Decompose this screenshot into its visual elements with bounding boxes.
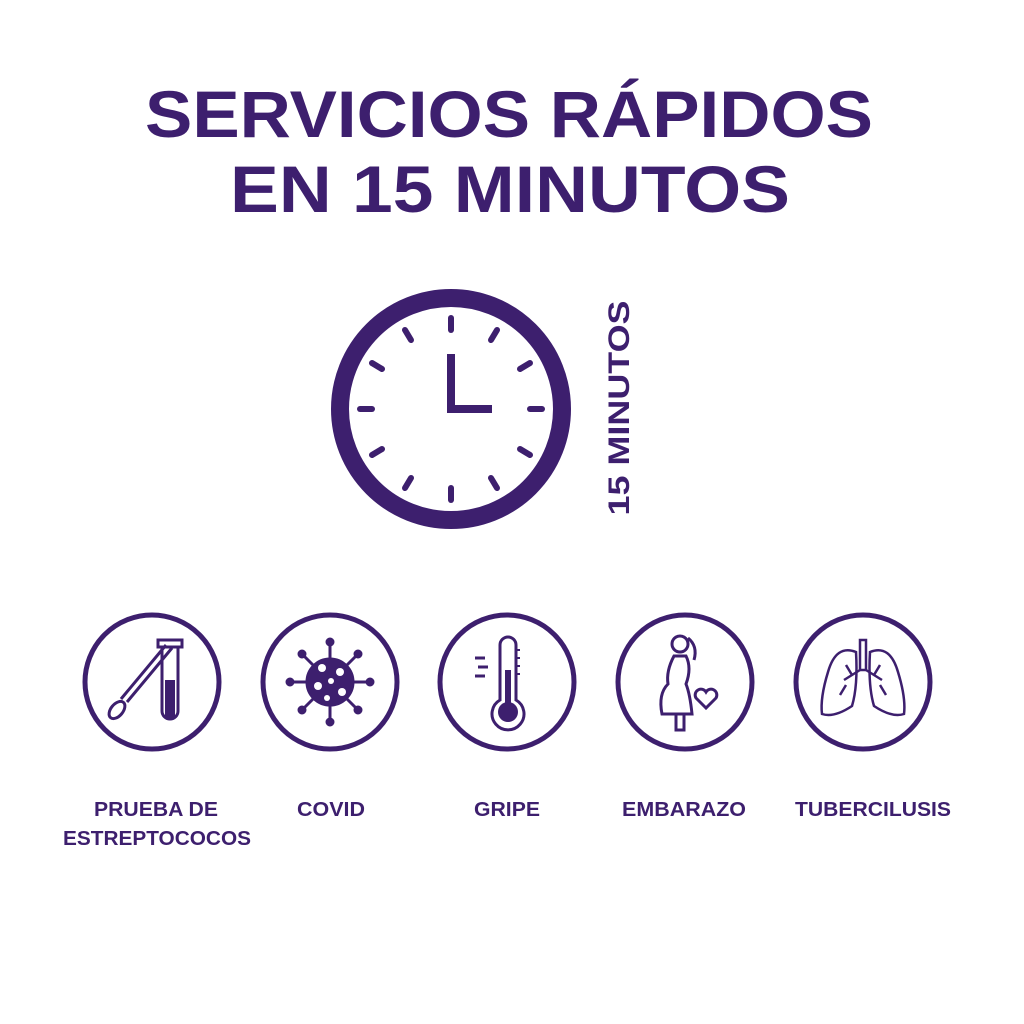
icon: strep test: [85, 615, 219, 749]
icon: thermometer: [440, 615, 574, 749]
labels: GRIPE: [474, 799, 540, 821]
labels: EMBARAZO: [622, 799, 746, 821]
icon: pregnancy: [618, 615, 752, 749]
labels: TUBERCILUSIS: [795, 799, 951, 821]
icon: covid virus: [263, 615, 397, 749]
labels: PRUEBA DE: [94, 799, 218, 821]
icon: lungs: [796, 615, 930, 749]
title: EN 15 MINUTOS: [230, 152, 790, 226]
title: [145, 77, 873, 226]
icon: clock: [340, 298, 562, 520]
title: SERVICIOS RÁPIDOS: [145, 77, 873, 151]
vertical label: 15 minutos: 15 MINUTOS: [603, 300, 636, 516]
labels: ESTREPTOCOCOS: [63, 828, 251, 850]
labels: [63, 799, 951, 850]
labels: COVID: [297, 799, 365, 821]
